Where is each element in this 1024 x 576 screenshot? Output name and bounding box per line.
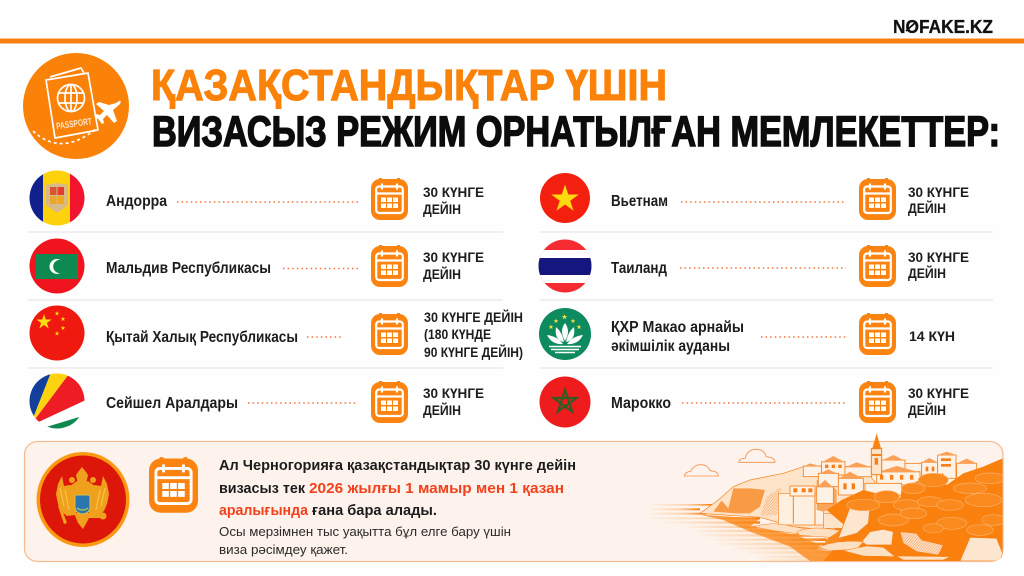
text: note: виза рәсімдеу қажет. (219, 542, 348, 557)
row: Macau (539, 308, 955, 360)
forest (823, 458, 1003, 561)
flag: Macau (539, 308, 591, 360)
title: ҚАЗАҚСТАНДЫҚТАР ҮШІН (151, 61, 667, 110)
row: Macau: ҚХР Макао арнайы (611, 319, 744, 336)
row: Vietnam (540, 173, 969, 223)
row: Thailand: ДЕЙІН (908, 266, 946, 281)
flag: Thailand (538, 239, 592, 293)
land base (824, 528, 1002, 561)
row: Seychelles: ДЕЙІН (423, 403, 461, 418)
text: note: Осы мерзімнен тыс уақытта бұл елге бару үшін (219, 524, 511, 539)
white cliffs (838, 506, 1003, 561)
flag: Maldives (29, 238, 85, 294)
row: Morocco (540, 376, 969, 428)
text: note (219, 458, 576, 557)
sea (651, 504, 832, 561)
icon: passport and plane: PASSPORT (55, 116, 93, 132)
shore rocks (753, 524, 950, 560)
row: Andorra: 30 КҮНГЕ (423, 185, 484, 200)
text: note: аралығында (219, 503, 309, 519)
text: note: Ал Черногорияға қазақстандықтар 30 күнге дейін (219, 458, 576, 474)
icon: calendar (149, 457, 198, 513)
top orange rule (0, 38, 1024, 44)
row: Andorra: Андорра (106, 193, 167, 210)
text: note: визасыз тек (219, 481, 306, 497)
row: Andorra (29, 170, 484, 226)
clouds (684, 449, 775, 476)
row: Vietnam: ДЕЙІН (908, 201, 946, 216)
flag: China (30, 306, 84, 360)
flag: Andorra (29, 170, 85, 226)
town (790, 455, 977, 503)
row: Seychelles (30, 374, 484, 428)
flag: Montenegro coat of arms (36, 452, 130, 547)
row: Maldives: ДЕЙІН (423, 267, 461, 282)
text: note: 2026 жылғы 1 мамыр мен 1 қазан (309, 481, 564, 497)
shoreline wedge (700, 514, 832, 561)
row: China: Қытай Халық Республикасы (106, 329, 298, 346)
row: China: 30 КҮНГЕ ДЕЙІН (424, 310, 523, 325)
logo: NOFAKE.KZ: NOFAKE.KZ (893, 17, 993, 37)
row: Thailand: Таиланд (611, 260, 667, 277)
row: Morocco: ДЕЙІН (908, 403, 946, 418)
row: Maldives: 30 КҮНГЕ (423, 250, 484, 265)
fortress wall (778, 493, 823, 525)
tower spire above panel (872, 433, 881, 449)
illustration: coastal town (650, 433, 1005, 561)
row: China: (180 КҮНДЕ (424, 327, 491, 342)
row: Thailand (538, 239, 969, 293)
tree tops (847, 473, 1005, 535)
row: Morocco: Марокко (611, 395, 671, 412)
flag: Morocco (540, 376, 590, 428)
row: Andorra: ДЕЙІН (423, 202, 461, 217)
row: China: 90 КҮНГЕ ДЕЙІН) (424, 345, 523, 360)
text: note: ғана бара алады. (312, 503, 437, 519)
row: Maldives (29, 238, 484, 294)
row: Morocco: 30 КҮНГЕ (908, 386, 969, 401)
row: Macau: әкімшілік ауданы (611, 338, 730, 355)
row: China (30, 306, 523, 360)
row: Seychelles: Сейшел Аралдары (106, 395, 238, 412)
flag: Seychelles (30, 374, 84, 428)
cliffs left (700, 467, 883, 530)
panel: Montenegro note (24, 433, 1005, 562)
title (151, 61, 1000, 156)
row: Vietnam: Вьетнам (611, 193, 668, 210)
icon: passport and plane (23, 53, 129, 159)
row: Seychelles: 30 КҮНГЕ (423, 386, 484, 401)
row: Vietnam: 30 КҮНГЕ (908, 185, 969, 200)
row: Macau: 14 КҮН (909, 329, 955, 344)
row: Maldives: Мальдив Республикасы (106, 260, 271, 277)
row: Thailand: 30 КҮНГЕ (908, 250, 969, 265)
flag: Vietnam (540, 173, 590, 223)
